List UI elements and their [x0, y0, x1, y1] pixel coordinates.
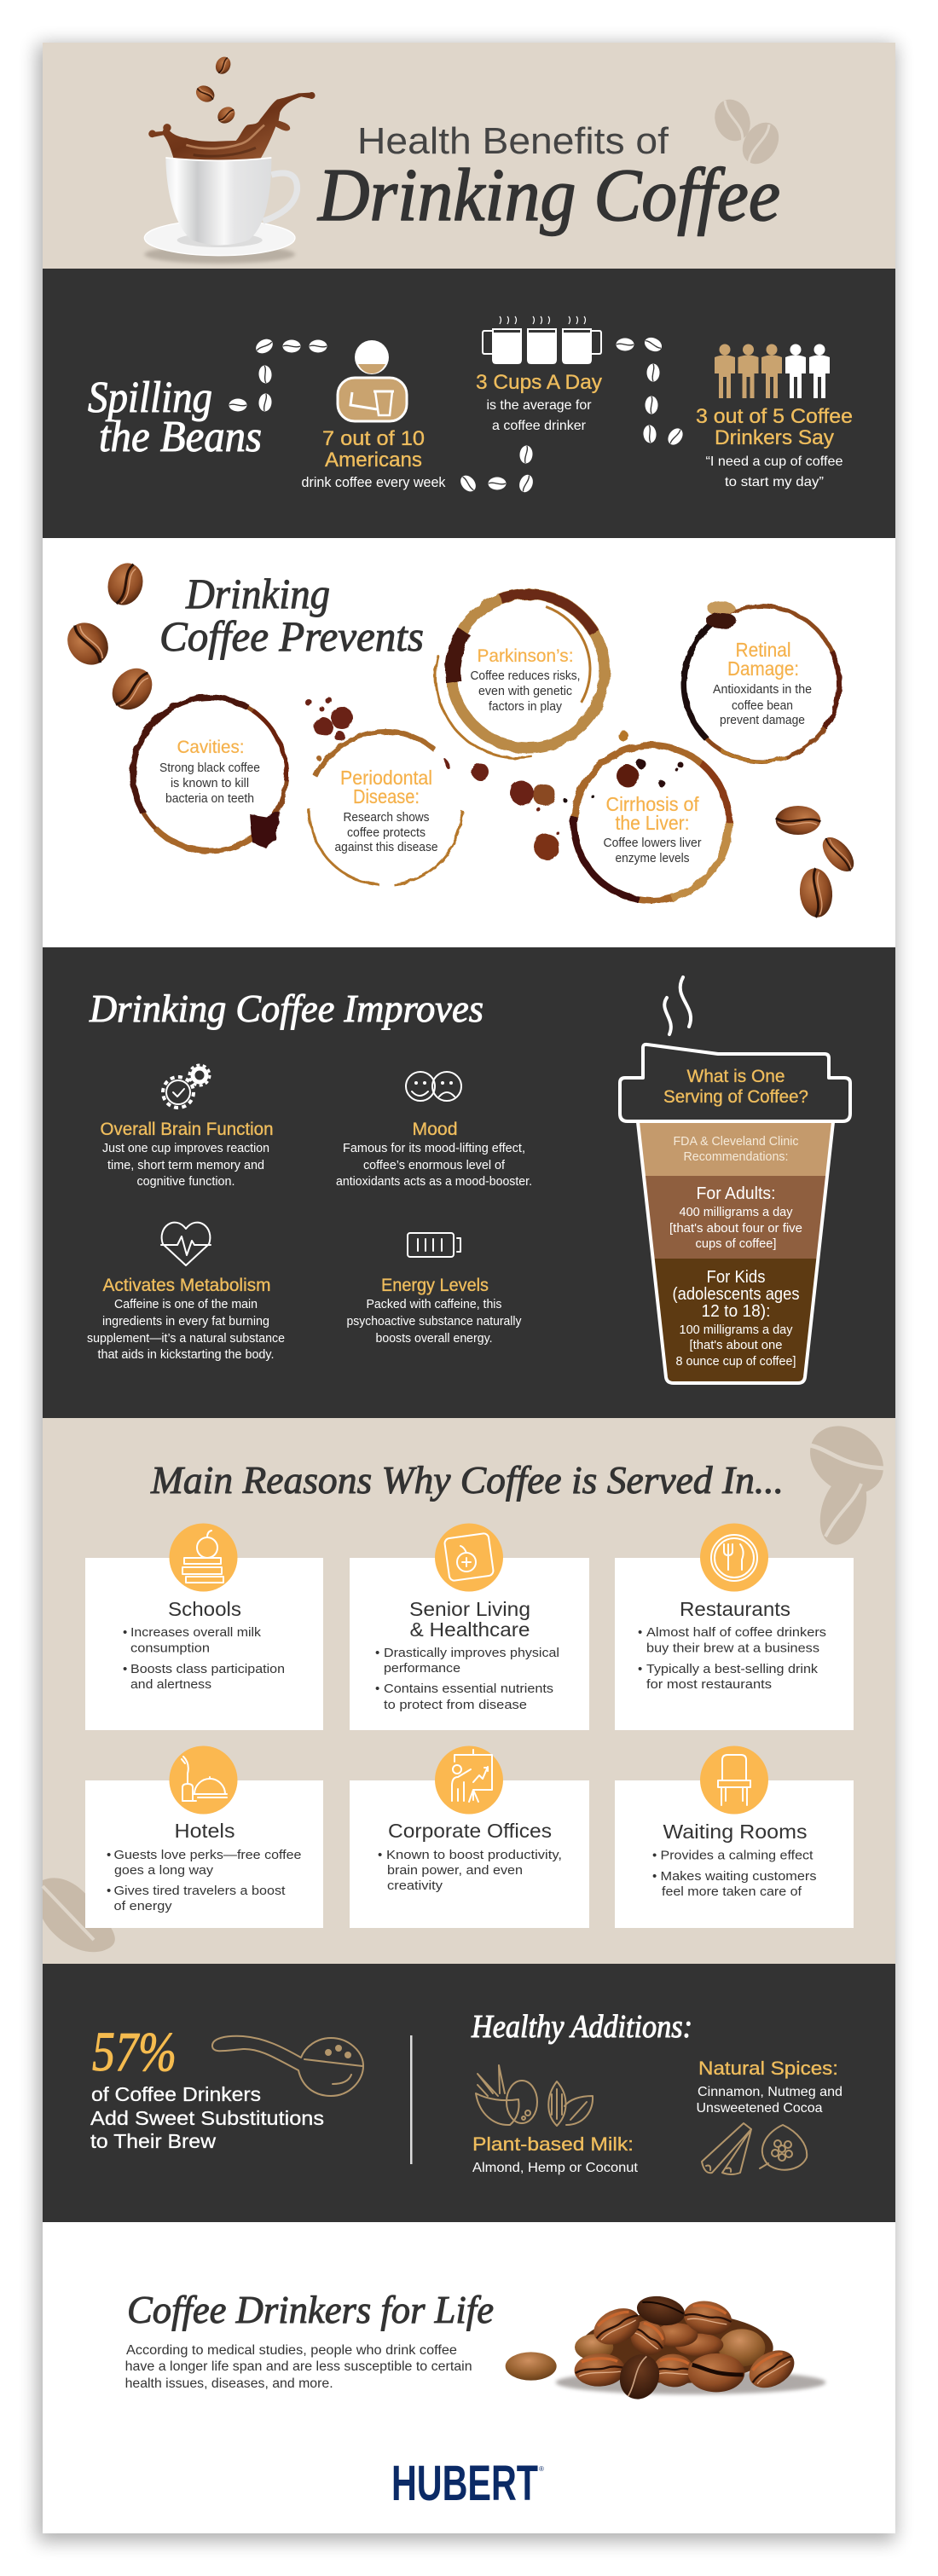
ring: retinal damage: prevent damage [720, 714, 805, 727]
card: corporate offices [350, 1746, 589, 1928]
stat: 7 out of 10 Americans: drink coffee every week [302, 475, 446, 490]
stat: 3 out of 5 coffee drinkers: 3 out of 5 Coffee [696, 405, 853, 428]
bullets [378, 1848, 562, 1893]
illustration: coffee bean pile [506, 2293, 825, 2405]
text: mood: antioxidants acts as a mood-booster. [336, 1175, 532, 1189]
stat: 3 out of 5 coffee drinkers: to start my day” [725, 475, 824, 489]
stat: 3 out of 5 coffee drinkers: “I need a cup of coffee [706, 454, 843, 469]
ring: cavities: bacteria on teeth [165, 792, 254, 806]
icon: happy and sad faces [406, 1072, 461, 1101]
bullets: • [123, 1662, 127, 1676]
trail of white coffee beans [229, 335, 686, 495]
bullets: Drastically improves physical [384, 1646, 559, 1660]
card: hotels [85, 1746, 323, 1928]
text: activates metabolism [87, 1276, 285, 1362]
kids text: 100 milligrams a day [679, 1323, 793, 1337]
text: energy levels: Packed with caffeine, this [367, 1298, 501, 1311]
stat: 57%: Add Sweet Substitutions [90, 2107, 324, 2129]
text: overall brain function: cognitive function. [136, 1175, 235, 1189]
text: activates metabolism: that aids in kickstarting the body. [97, 1348, 275, 1362]
card: senior living [350, 1523, 589, 1730]
icon: cinnamon and cocoa [702, 2123, 807, 2174]
stat: 3 out of 5 coffee drinkers [696, 405, 853, 489]
bullets: Known to boost productivity, [386, 1848, 562, 1862]
text: mood [336, 1120, 532, 1189]
lid text: Serving of Coffee? [663, 1087, 808, 1107]
bullets: Guests love perks—free coffee [114, 1848, 302, 1862]
icon: presenter at board [452, 1750, 492, 1802]
heading: drinking coffee improves: Drinking Coffee Improves [89, 987, 483, 1030]
heading: drinking coffee prevents [159, 570, 424, 660]
background bean bottom left [43, 1878, 115, 1952]
ring: periodontal disease: Research shows [343, 811, 430, 825]
text: medical studies [125, 2343, 472, 2391]
stat: 57%: 57% [92, 2021, 177, 2083]
ring: retinal damage [651, 574, 871, 794]
icon: three steaming cups [483, 316, 601, 364]
kids text: 12 to 18): [701, 1302, 771, 1321]
ring: retinal damage: Retinal [735, 639, 791, 661]
text: energy levels [346, 1276, 522, 1346]
adults text: cups of coffee] [696, 1237, 776, 1251]
bullets: Gives tired travelers a boost [114, 1884, 286, 1898]
panel: coffee drinkers for life [43, 2222, 895, 2533]
icon: gears [163, 1065, 210, 1108]
text: mood: Famous for its mood-lifting effect, [343, 1142, 525, 1155]
ring: cavities: Cavities: [177, 738, 244, 757]
card: hotels: Hotels [174, 1820, 235, 1842]
bullets: Typically a best-selling drink [646, 1662, 819, 1676]
title: Health Benefits of [357, 120, 669, 162]
ring: cirrhosis of the liver: enzyme levels [616, 852, 689, 865]
icon: person holding a cup [338, 340, 407, 421]
text: mood: coffee’s enormous level of [363, 1159, 506, 1172]
icon: coconut and almond [476, 2065, 593, 2126]
text: natural spices: Natural Spices: [698, 2058, 838, 2079]
text: natural spices: Unsweetened Cocoa [696, 2101, 823, 2116]
text: overall brain function: Overall Brain Function [101, 1120, 273, 1139]
bullets: • [378, 1848, 382, 1862]
ring: retinal damage: coffee bean [732, 699, 793, 713]
ring: retinal damage: Damage: [727, 657, 799, 680]
icon: battery [408, 1233, 460, 1257]
recommendations text: Recommendations: [684, 1149, 788, 1164]
heading: drinking coffee prevents: Coffee Prevents [159, 612, 424, 660]
card: waiting rooms [615, 1746, 854, 1928]
bullets: • [107, 1884, 111, 1898]
stat: 3 out of 5 coffee drinkers: Drinkers Say [715, 426, 834, 449]
bullets [638, 1625, 826, 1692]
text: overall brain function: time, short term memory and [107, 1159, 264, 1172]
card: senior living: & Healthcare [409, 1618, 530, 1641]
ring: cirrhosis of the liver [542, 714, 761, 932]
ring: cirrhosis of the liver: the Liver: [616, 812, 689, 834]
bullets: • [638, 1662, 642, 1676]
recommendations text [674, 1134, 799, 1164]
card: schools [85, 1523, 323, 1730]
logo: hubert: HUBERT [391, 2456, 538, 2511]
bullets: Contains essential nutrients [384, 1682, 553, 1696]
icon: background coffee beans [709, 94, 786, 171]
panel: spilling the beans [43, 269, 895, 538]
card: waiting rooms: Waiting Rooms [663, 1821, 807, 1843]
kids text: For Kids [706, 1268, 766, 1287]
adults text: 400 milligrams a day [679, 1206, 793, 1219]
bullets [123, 1625, 285, 1692]
text: activates metabolism: Activates Metabolism [102, 1276, 271, 1295]
icon: chair [718, 1755, 750, 1805]
text: activates metabolism: supplement—it’s a natural substance [87, 1332, 285, 1346]
card: corporate offices: Corporate Offices [388, 1820, 552, 1842]
bullets: Almost half of coffee drinkers [646, 1625, 826, 1640]
text: mood: Mood [413, 1120, 457, 1139]
header panel [43, 43, 895, 269]
stat: 57%: to Their Brew [90, 2130, 216, 2152]
icon: steam [664, 977, 691, 1034]
text: overall brain function [101, 1120, 273, 1189]
text: medical studies: have a longer life span and are less susceptible to certain [125, 2359, 472, 2374]
ring: periodontal disease: against this disease [334, 841, 438, 854]
illustration: coffee cup with splash [144, 55, 316, 263]
icon: apple on books [182, 1531, 223, 1583]
heading: spilling the beans: Spilling [88, 373, 212, 422]
card: restaurants [615, 1523, 854, 1730]
bullets: for most restaurants [646, 1677, 772, 1692]
adults text [669, 1184, 802, 1251]
bullets: creativity [387, 1878, 443, 1893]
stat: 3 cups a day: is the average for [486, 398, 592, 413]
icon: heartbeat [161, 1223, 211, 1265]
coffee droplets [305, 698, 684, 860]
bullets: • [652, 1869, 657, 1884]
cup lid [620, 1045, 850, 1121]
stat: 7 out of 10 Americans: 7 out of 10 [322, 427, 425, 450]
bullets: of energy [114, 1899, 172, 1913]
panel: sweet substitutions and healthy additions [43, 1964, 895, 2222]
lid text: What is One [687, 1067, 785, 1086]
icon: tablet apple [444, 1533, 494, 1581]
ring: periodontal disease [283, 706, 488, 911]
text: medical studies: According to medical studies, people who drink coffee [126, 2343, 457, 2358]
stat: 3 cups a day [476, 371, 602, 433]
heading: coffee drinkers for life: Coffee Drinkers for Life [127, 2288, 494, 2331]
ring: parkinson's: factors in play [489, 700, 563, 714]
bullets [375, 1646, 559, 1712]
panel: main reasons [43, 1412, 896, 1964]
stat: 7 out of 10 Americans: Americans [325, 449, 422, 472]
bullets: brain power, and even [387, 1863, 523, 1878]
text: medical studies: health issues, diseases, and more. [125, 2376, 333, 2391]
bullets: • [652, 1849, 657, 1862]
text: natural spices [696, 2058, 842, 2116]
icon: spoon [212, 2036, 363, 2096]
bullets: • [107, 1848, 111, 1862]
kids text: (adolescents ages [672, 1285, 800, 1304]
heading: drinking coffee prevents: Drinking [185, 570, 330, 617]
ring: periodontal disease: Periodontal [340, 767, 432, 789]
lid text [663, 1067, 808, 1107]
card: restaurants: Restaurants [680, 1598, 790, 1620]
ring: retinal damage: Antioxidants in the [713, 683, 812, 697]
bullets: • [375, 1682, 379, 1696]
heading: spilling the beans: the Beans [99, 413, 262, 461]
icon: plate and cutlery [711, 1535, 757, 1581]
bullets: goes a long way [114, 1863, 214, 1878]
heading: main reasons: Main Reasons Why Coffee is Served In... [150, 1458, 784, 1502]
coffee cup: what is one serving [620, 1045, 850, 1383]
bullets: • [123, 1625, 127, 1640]
background beans top right [797, 1412, 896, 1551]
stat: 3 cups a day: a coffee drinker [492, 419, 587, 433]
bullets [107, 1848, 302, 1913]
bullets [652, 1849, 817, 1899]
bullets: • [638, 1625, 642, 1640]
card: schools: Schools [168, 1598, 241, 1620]
ring: cavities: is known to kill [171, 777, 249, 790]
ring: parkinson's [423, 573, 626, 771]
ring: parkinson's: even with genetic [478, 685, 572, 698]
panel: drinking coffee improves [43, 947, 895, 1418]
stat: 57%: of Coffee Drinkers [91, 2083, 261, 2105]
ring: periodontal disease: coffee protects [347, 826, 426, 840]
heading: healthy additions: Healthy Additions: [471, 2009, 692, 2045]
kids text: [that's about one [689, 1339, 783, 1352]
text: plant-based milk: Almond, Hemp or Coconut [472, 2161, 639, 2175]
bullets: • [375, 1646, 379, 1660]
icon: five people [715, 344, 830, 398]
bullets: Increases overall milk [130, 1625, 262, 1640]
bullets: and alertness [130, 1677, 211, 1692]
bullets: Makes waiting customers [660, 1869, 817, 1884]
ring: cirrhosis of the liver: Coffee lowers liver [604, 836, 702, 850]
bullets: Provides a calming effect [660, 1849, 814, 1862]
bullets: buy their brew at a business [646, 1641, 819, 1656]
text: energy levels: psychoactive substance naturally [346, 1315, 522, 1329]
panel: drinking coffee prevents [43, 538, 895, 947]
text: energy levels: boosts overall energy. [375, 1332, 493, 1346]
kids text [672, 1268, 800, 1369]
heading: spilling the beans [88, 373, 262, 461]
text: activates metabolism: ingredients in every fat burning [102, 1315, 269, 1329]
adults text: [that's about four or five [669, 1222, 802, 1236]
text: activates metabolism: Caffeine is one of the main [114, 1298, 258, 1311]
bullets: feel more taken care of [662, 1884, 802, 1899]
bullets: Boosts class participation [130, 1662, 285, 1676]
ring: parkinson's: Parkinson’s: [478, 646, 573, 666]
title: Drinking Coffee [317, 154, 780, 237]
stat: 7 out of 10 Americans [302, 427, 446, 490]
bullets: performance [384, 1661, 460, 1676]
ring: cavities: Strong black coffee [159, 761, 260, 775]
text: overall brain function: Just one cup improves reaction [102, 1142, 269, 1155]
bullets: to protect from disease [384, 1698, 527, 1712]
title [317, 120, 780, 237]
coffee beans right [776, 806, 860, 918]
stat: 57% [90, 2021, 324, 2152]
bullets: consumption [130, 1641, 210, 1656]
cup bands [638, 1122, 833, 1383]
ring: periodontal disease: Disease: [353, 785, 420, 808]
ring: cirrhosis of the liver: Cirrhosis of [605, 793, 699, 815]
kids text: 8 ounce cup of coffee] [675, 1355, 796, 1369]
text: plant-based milk [472, 2133, 639, 2175]
coffee beans left [59, 559, 160, 718]
ring: cavities [101, 666, 318, 883]
text: plant-based milk: Plant-based Milk: [472, 2133, 634, 2155]
text: natural spices: Cinnamon, Nutmeg and [698, 2085, 842, 2099]
logo: hubert: ® [539, 2465, 544, 2473]
text: energy levels: Energy Levels [381, 1276, 489, 1295]
ring: parkinson's: Coffee reduces risks, [471, 669, 580, 683]
adults text: For Adults: [696, 1184, 776, 1203]
icon: cloche and vase [182, 1757, 227, 1801]
stat: 3 cups a day: 3 Cups A Day [476, 371, 602, 394]
recommendations text: FDA & Cleveland Clinic [674, 1134, 799, 1149]
card: senior living: Senior Living [409, 1598, 530, 1620]
